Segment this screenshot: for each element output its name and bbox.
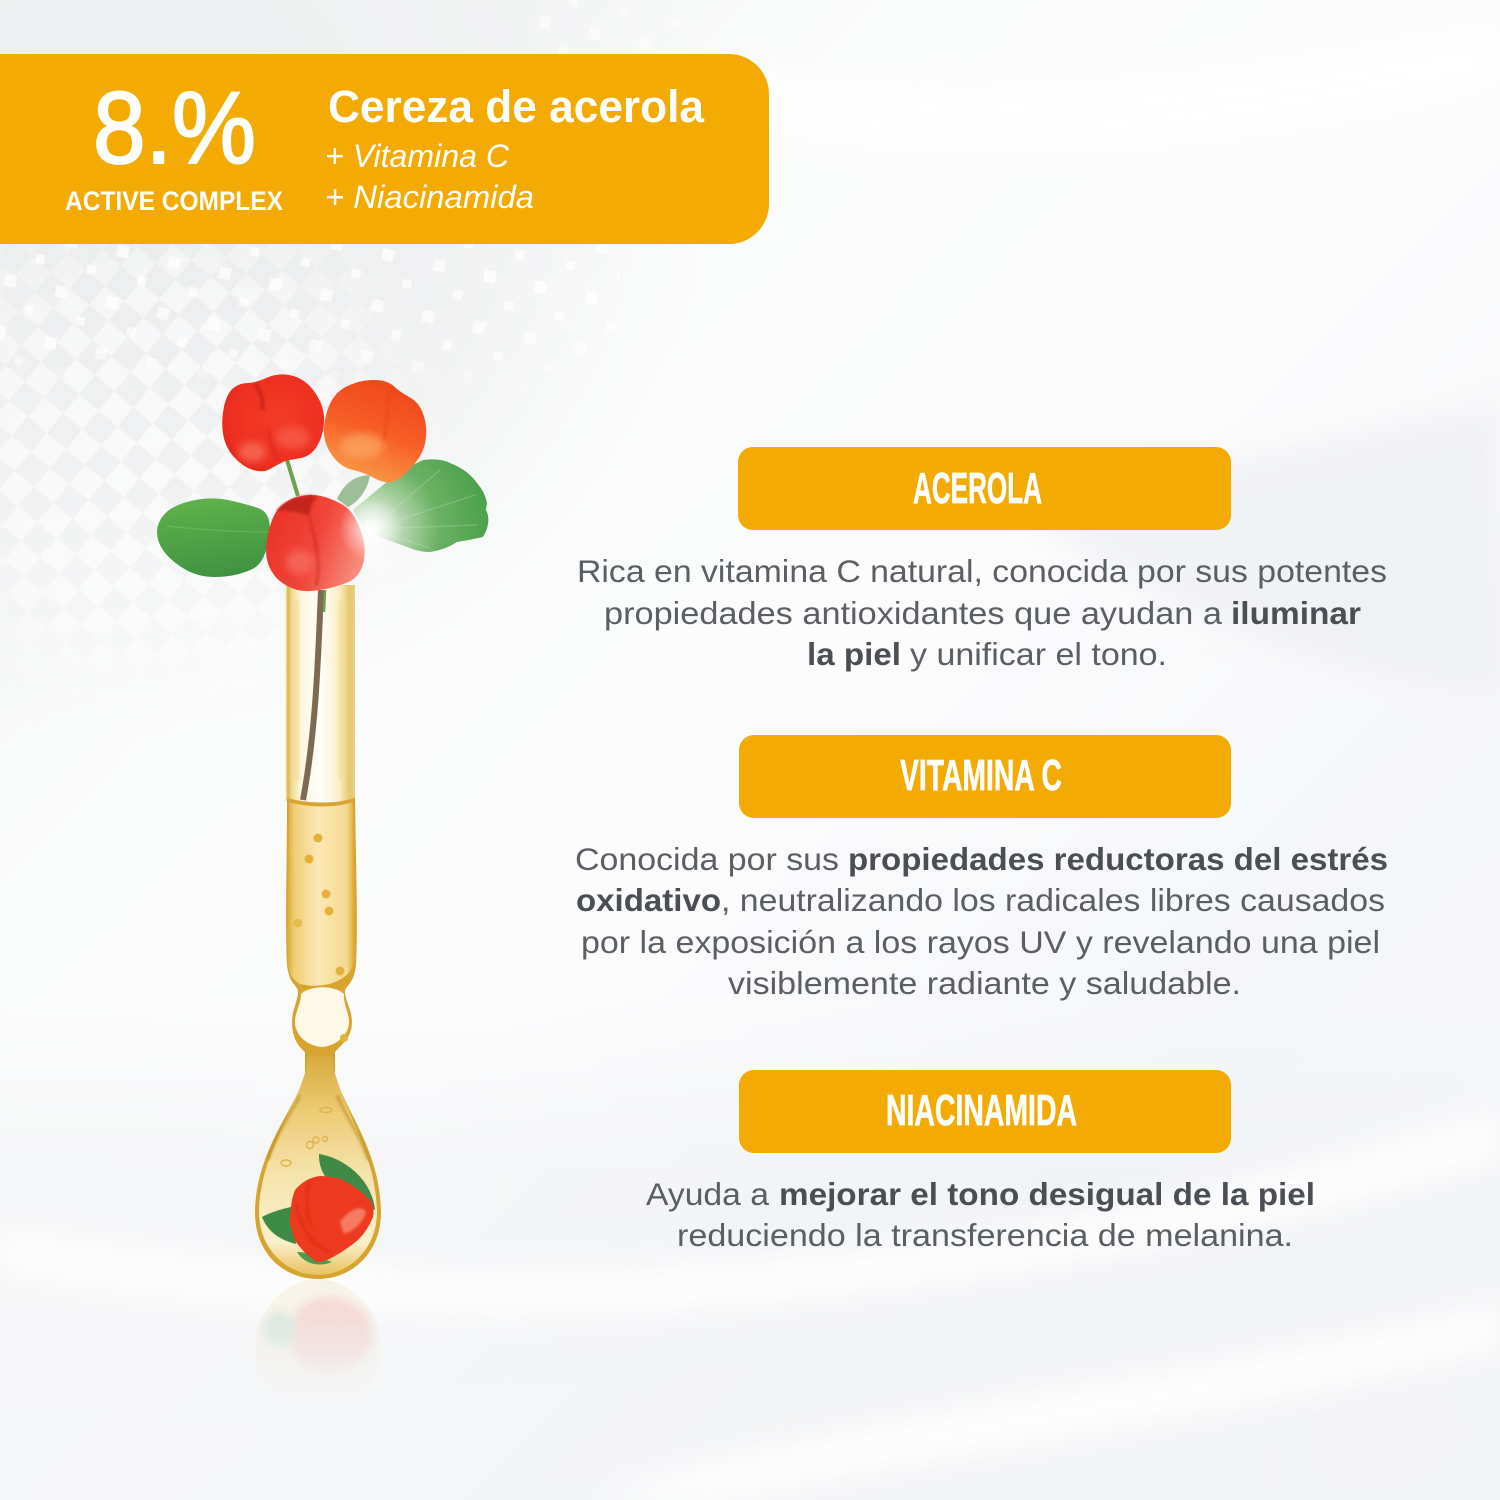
text: acerola: propiedades antioxidantes que ayudan a	[604, 595, 1223, 631]
fruit: front	[266, 495, 365, 591]
text: acerola: iluminar	[1231, 595, 1361, 631]
small leaf	[337, 475, 370, 507]
text: vitamina c: por la exposición a los rayos UV y revelando una piel	[581, 924, 1380, 960]
bubbles	[294, 834, 348, 1042]
section: acerola	[577, 447, 1387, 672]
acerola inside drop	[262, 1154, 375, 1265]
fruit stem	[287, 460, 298, 496]
fruit: top right	[324, 380, 426, 483]
active complex label: ACTIVE COMPLEX	[65, 186, 283, 216]
text: vitamina c: , neutralizando los radicales libres causados	[721, 882, 1385, 918]
light flare	[339, 497, 403, 561]
ingredient list: + Niacinamida	[325, 179, 534, 215]
reflection	[255, 1279, 381, 1372]
heading pill: niacinamida: NIACINAMIDA	[886, 1086, 1077, 1135]
text: acerola	[577, 553, 1387, 672]
section: vitamina c	[575, 735, 1388, 1001]
text: vitamina c: oxidativo	[576, 882, 721, 918]
text: vitamina c: Conocida por sus	[575, 841, 839, 877]
fruit: top left	[222, 374, 324, 471]
text: niacinamida: reduciendo la transferencia de melanina.	[677, 1217, 1293, 1253]
heading pill: acerola: ACEROLA	[913, 464, 1042, 513]
background	[0, 0, 1488, 370]
leaf left	[157, 498, 270, 577]
text: niacinamida	[646, 1176, 1315, 1253]
ingredient list: + Vitamina C	[325, 138, 510, 174]
ingredient list	[325, 138, 534, 215]
oil column	[255, 798, 381, 1279]
text: vitamina c: visiblemente radiante y saludable.	[728, 965, 1241, 1001]
section: niacinamida	[646, 1070, 1315, 1253]
text: vitamina c: propiedades reductoras del estrés	[848, 841, 1388, 877]
text: niacinamida: Ayuda a	[646, 1176, 770, 1212]
ingredient title: Cereza de acerola	[328, 81, 705, 132]
banner: active complex	[0, 54, 769, 244]
percentage: 8.%	[93, 71, 256, 185]
text: acerola: la piel	[807, 636, 901, 672]
illustration: dropper with acerola	[157, 374, 488, 1410]
leaf right	[353, 459, 488, 552]
heading pill: vitamina c	[739, 735, 1231, 818]
heading pill: niacinamida	[739, 1070, 1231, 1153]
heading pill: vitamina c: VITAMINA C	[900, 751, 1062, 800]
text: vitamina c	[575, 841, 1388, 1001]
heading pill: acerola	[738, 447, 1231, 530]
text: acerola: y unificar el tono.	[910, 636, 1167, 672]
text: acerola: Rica en vitamina C natural, conocida por sus potentes	[577, 553, 1387, 589]
text: niacinamida: mejorar el tono desigual de la piel	[779, 1176, 1315, 1212]
glass tube	[285, 585, 355, 801]
